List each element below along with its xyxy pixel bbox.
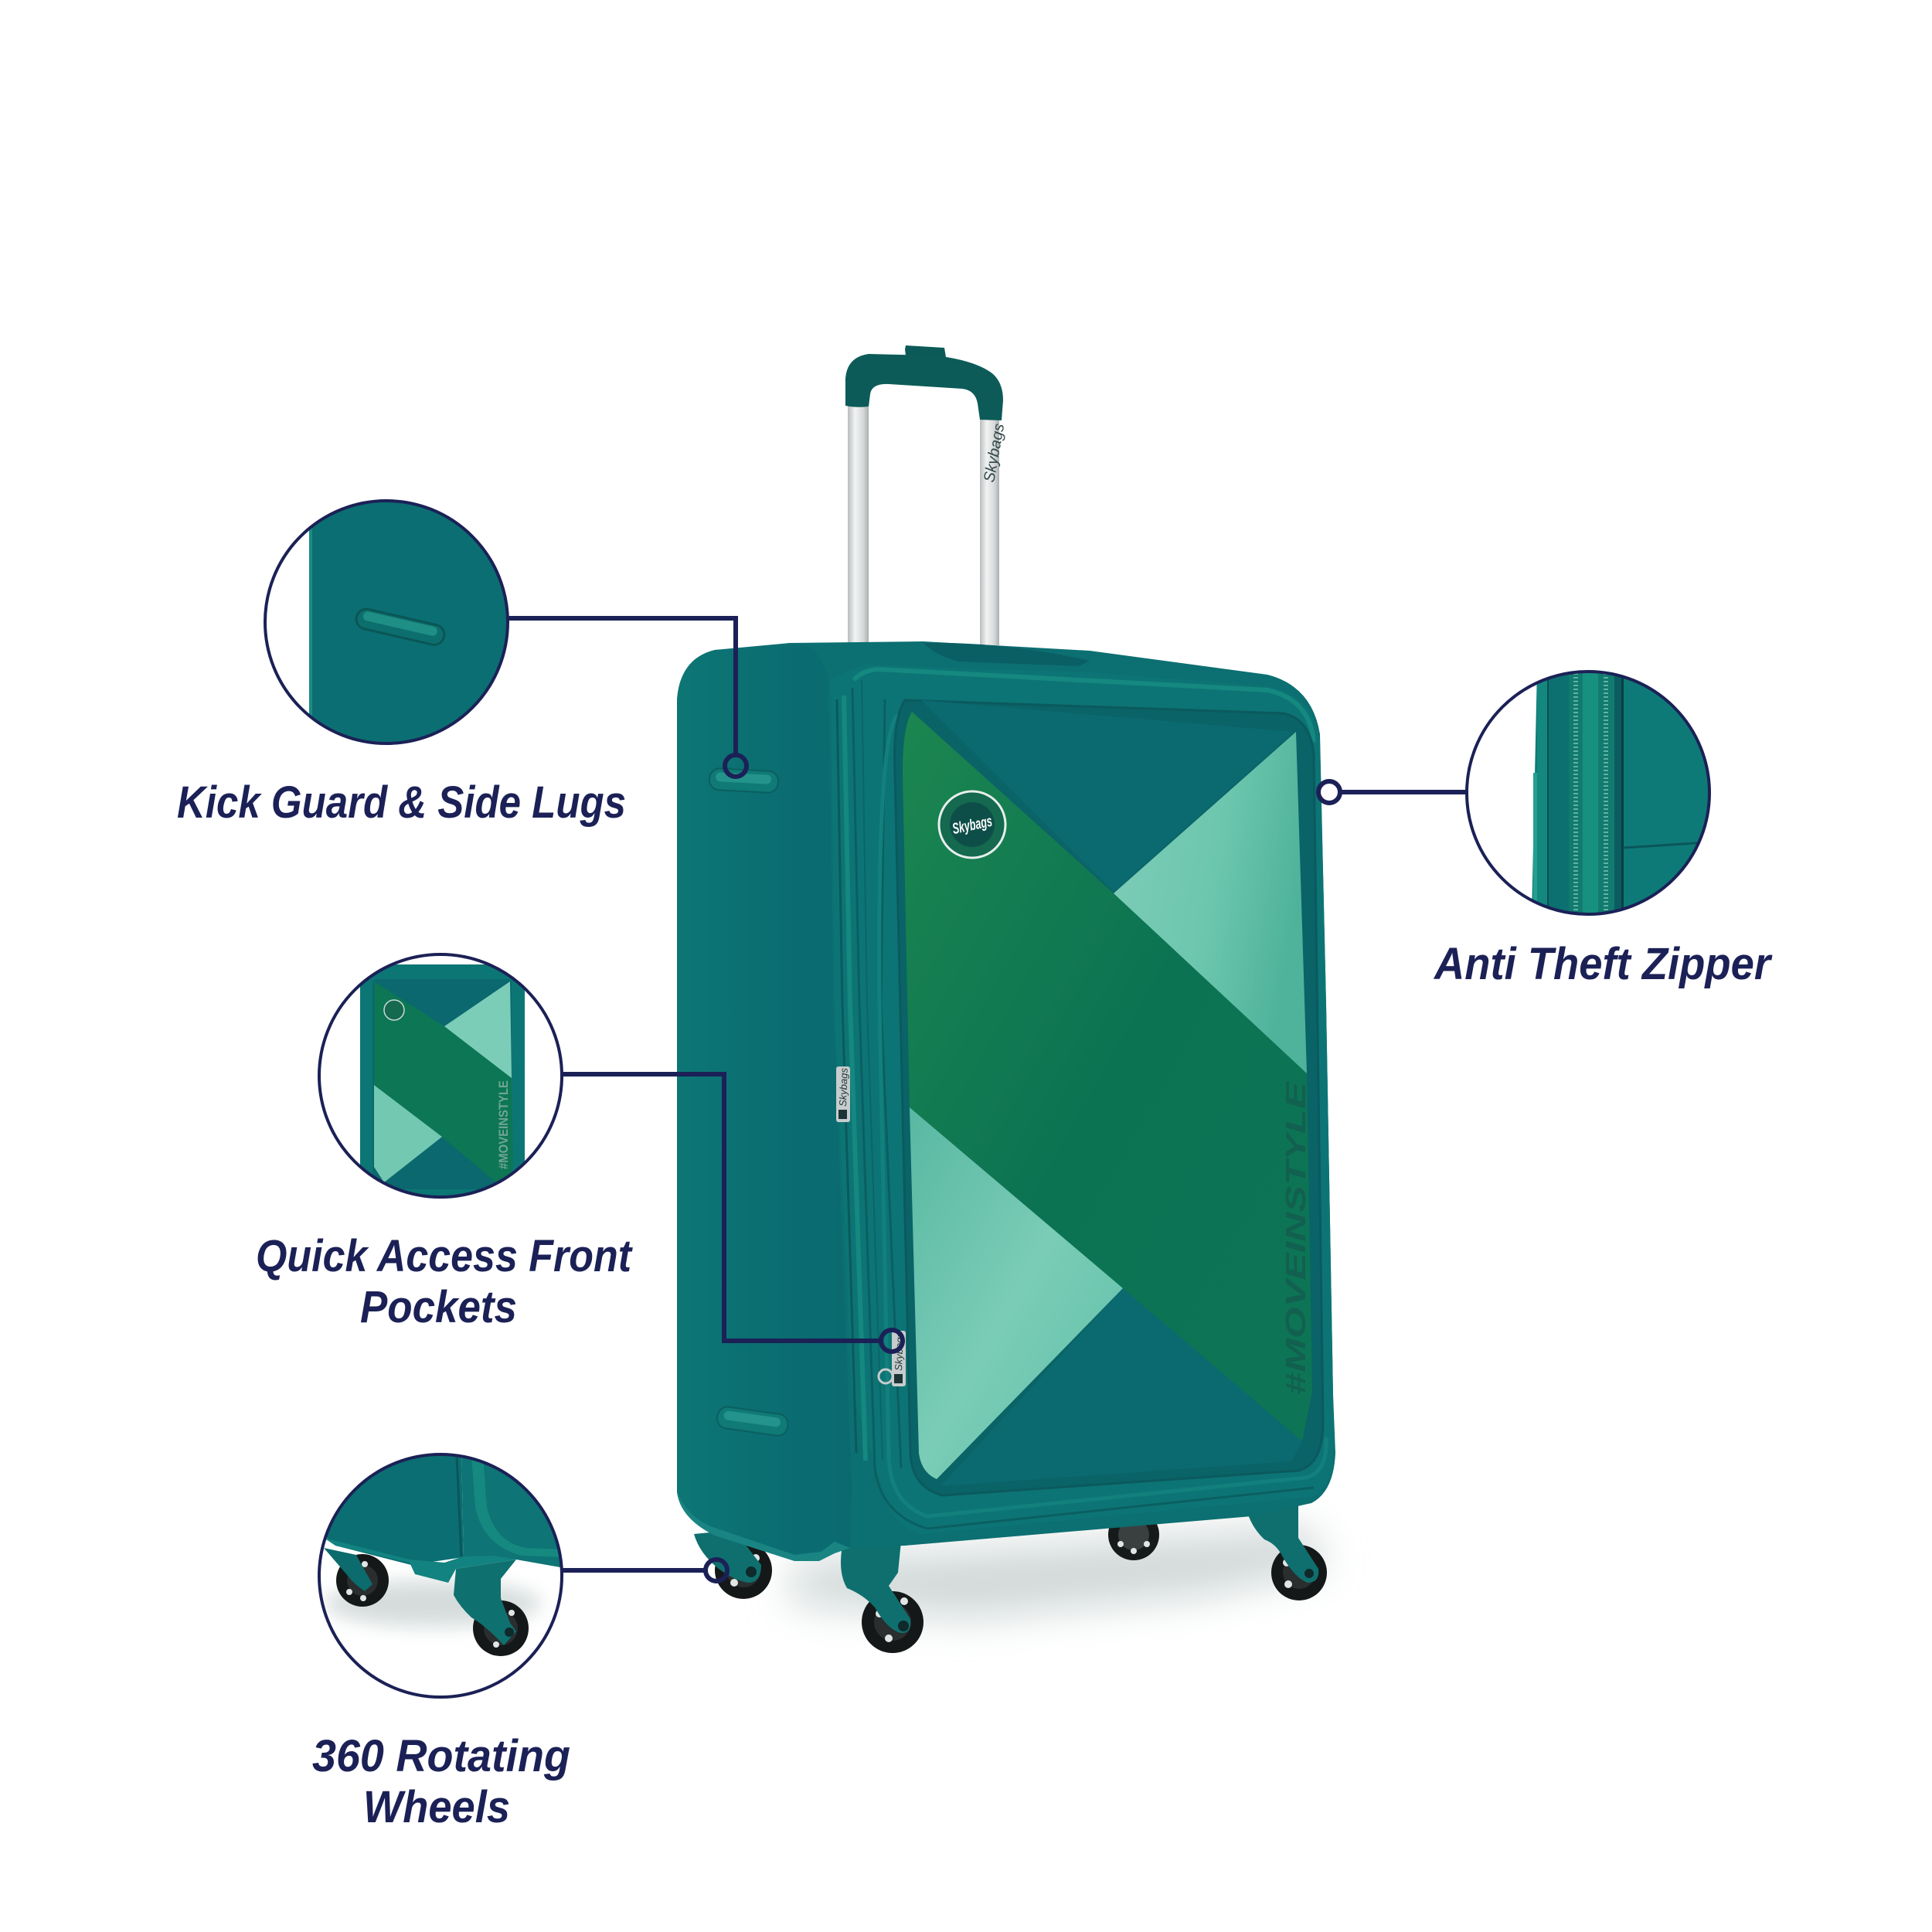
callout: quick access front pockets [256,952,903,1352]
leader line [562,1074,881,1341]
label: Pockets [360,1282,517,1332]
front panel: green diagonal band [903,712,1312,1441]
telescopic handle: Skybags [981,422,1008,484]
leader line [508,618,736,753]
left rear wheel [694,1530,772,1599]
floor shadow [788,1526,1329,1619]
rear wheel [1108,1509,1159,1560]
label: Quick Access Front [256,1231,633,1281]
marker [1318,781,1340,803]
suitcase product [677,345,1335,1653]
lower zipper pull [879,1331,906,1386]
hashtag print: #MOVEINSTYLE [1280,1081,1311,1395]
label: Wheels [363,1782,510,1832]
callout: kick guard and side lugs [177,498,747,828]
lower zipper pull: Skybags [893,1332,906,1371]
top carry handle [923,643,1090,666]
label: Kick Guard & Side Lugs [177,777,626,828]
front wheel [841,1542,923,1653]
body silhouette [677,641,1335,1560]
zipper bands [837,669,1326,1529]
label: 360 Rotating [312,1731,570,1781]
side panel [677,645,852,1560]
front panel: dark top triangle [921,700,1294,892]
front panel: light right triangle [1114,732,1307,1073]
right front wheel [1246,1503,1327,1600]
brand badge: Skybags [951,813,994,838]
front frame [831,665,1334,1534]
detail circle: zipper [1464,669,1716,917]
front pocket piping [895,700,1323,1495]
bottom corner guard [677,1492,850,1561]
marker [725,755,747,777]
upper side lug [709,768,779,793]
front panel: dark lower triangle [940,1288,1302,1486]
detail circle: side lug [263,498,510,746]
leader line [1338,790,1467,794]
label [256,1231,633,1332]
marker [706,1560,727,1581]
marker [881,1330,903,1352]
upper zipper pull: Skybags [837,1067,850,1107]
telescopic handle [845,345,1008,645]
front panel: light lower triangle [910,1107,1123,1479]
detail circle: front pockets [317,952,564,1204]
label: Anti Theft Zipper [1433,939,1773,989]
label [312,1731,570,1832]
leader line [562,1568,706,1573]
callout: 360 rotating wheels [312,1453,727,1832]
upper zipper pull [836,1066,850,1122]
detail circle: wheels [317,1453,564,1700]
lower side lug [716,1406,789,1437]
brand badge [939,791,1005,858]
callout: anti theft zipper [1318,669,1773,989]
detail circle: front pockets: #MOVEINSTYLE [496,1080,511,1169]
